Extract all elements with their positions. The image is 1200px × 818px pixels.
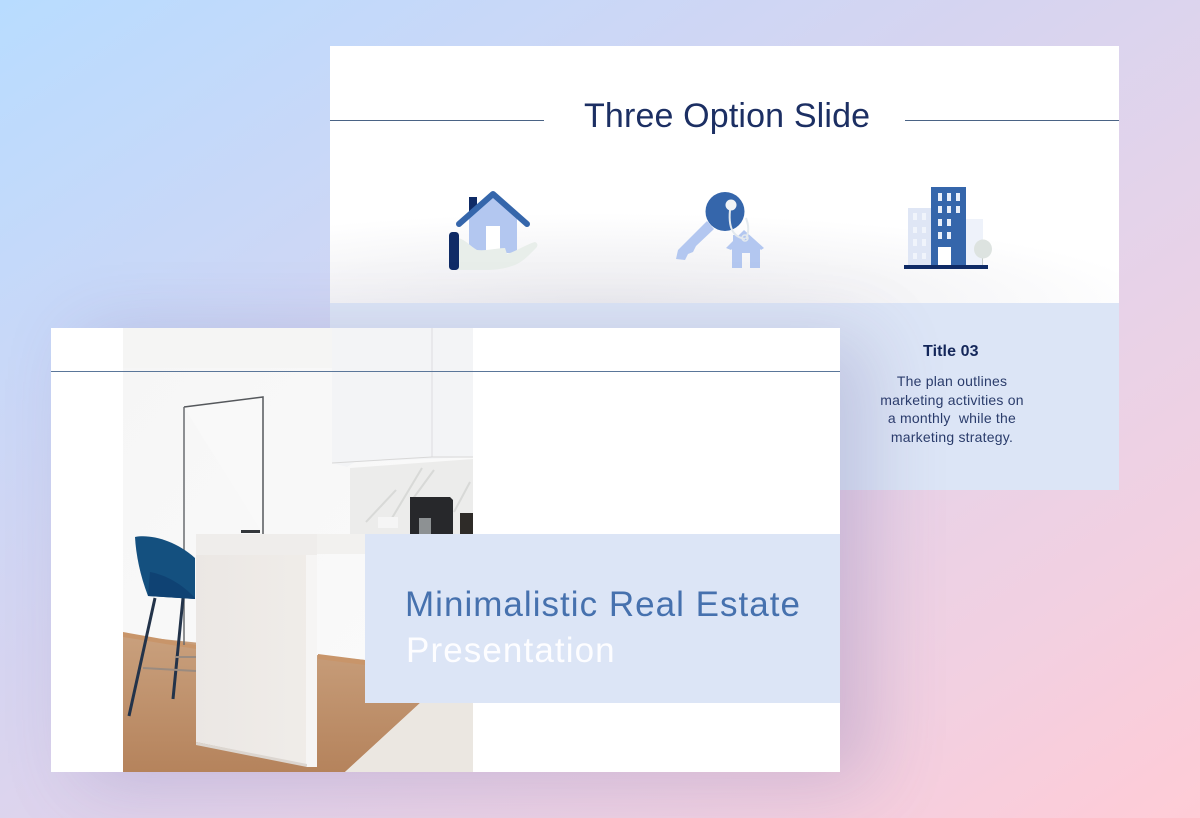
option 3 title: Title 03 — [923, 343, 979, 360]
floor — [123, 635, 420, 772]
icon: key with house fob — [676, 192, 764, 268]
icon: house in hand — [449, 191, 538, 270]
door frame — [184, 397, 263, 534]
heading rule left — [330, 120, 544, 121]
option 3 description: marketing strategy. — [891, 429, 1013, 445]
panel: three option slide — [330, 46, 1119, 490]
option 3 description — [880, 373, 1024, 445]
option 3 description: a monthly while the — [888, 410, 1016, 426]
stool — [129, 598, 183, 716]
title line 1: Minimalistic Real Estate — [405, 585, 801, 624]
title line 2: Presentation — [406, 631, 616, 670]
table — [196, 534, 371, 554]
interior photo — [123, 328, 473, 772]
title box — [365, 534, 840, 703]
option 3 description: marketing activities on — [880, 392, 1024, 408]
option 3 description: The plan outlines — [897, 373, 1007, 389]
icon: office buildings — [904, 187, 992, 269]
backsplash — [350, 459, 473, 534]
panel: cover slide — [51, 328, 840, 772]
cabinets — [332, 328, 473, 467]
coffee machine — [410, 497, 453, 534]
header rule — [51, 371, 840, 372]
heading rule right — [905, 120, 1119, 121]
heading: three option slide: Three Option Slide — [584, 97, 870, 135]
slide footer band — [330, 303, 1119, 490]
